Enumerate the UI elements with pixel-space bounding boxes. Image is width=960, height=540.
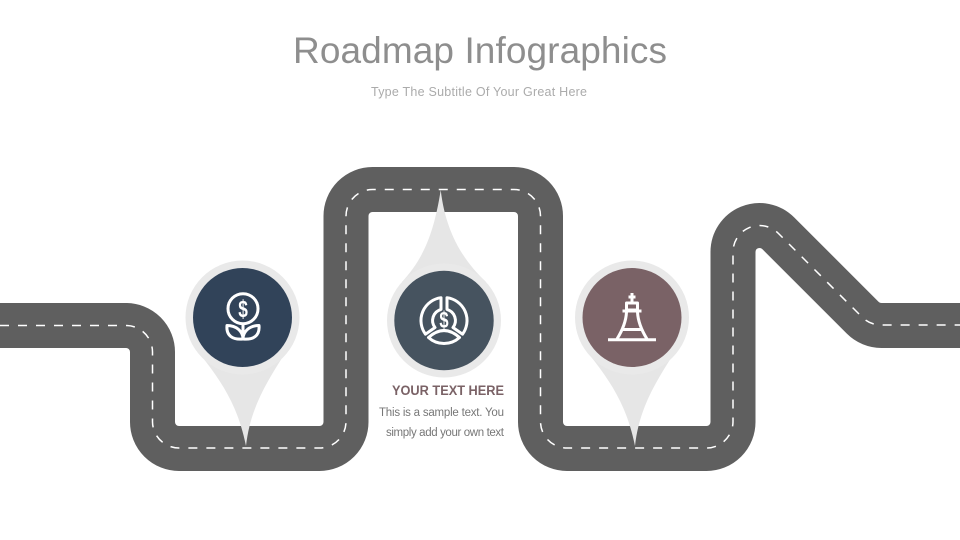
- pin: strategy milestone: [575, 260, 689, 446]
- title: Roadmap Infographics: [293, 30, 667, 71]
- winding road: [0, 190, 960, 448]
- pin: growth milestone: [186, 260, 300, 446]
- text body: [379, 407, 505, 439]
- text block: your text here: [379, 383, 505, 439]
- icon: dollar segmented ring: $: [439, 308, 449, 334]
- subtitle: Type The Subtitle Of Your Great Here: [371, 85, 587, 99]
- icon: chess king: [608, 293, 656, 340]
- text body: This is a sample text. You: [379, 407, 504, 419]
- text heading: YOUR TEXT HERE: [392, 383, 504, 398]
- icon: dollar flower: [227, 294, 259, 339]
- pin: finance milestone: [387, 190, 501, 378]
- icon: dollar segmented ring: [421, 298, 467, 344]
- text body: simply add your own text: [386, 427, 505, 439]
- icon: dollar flower: $: [238, 296, 248, 323]
